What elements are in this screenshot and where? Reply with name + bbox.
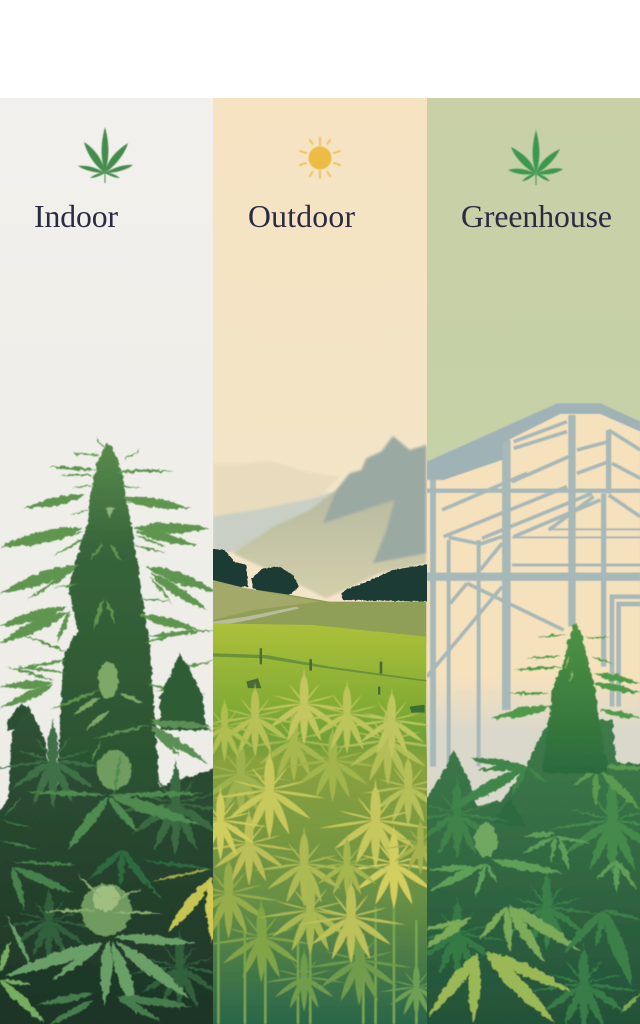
forest bbox=[206, 548, 433, 602]
panel: outdoor bbox=[213, 98, 427, 1024]
greenhouse frame bbox=[427, 403, 640, 817]
heading: Indoor: Indoor bbox=[34, 199, 118, 234]
mountain landscape bbox=[206, 436, 433, 763]
plant: greenhouse top cola bbox=[489, 622, 640, 773]
icon: sun bbox=[300, 138, 340, 178]
icon: cannabis leaf bbox=[508, 130, 563, 185]
plant: lower foliage backdrop bbox=[0, 705, 213, 1024]
heading: Outdoor: Outdoor bbox=[248, 199, 355, 234]
plant: tall indoor cola bbox=[0, 436, 218, 797]
heading: Greenhouse: Greenhouse bbox=[461, 199, 612, 234]
plant: outdoor crop bbox=[213, 668, 427, 1024]
icon: cannabis leaf bbox=[78, 127, 133, 183]
plant: greenhouse foliage bbox=[404, 720, 640, 1024]
meadow bbox=[213, 580, 426, 643]
plant: indoor lower leaves bbox=[0, 718, 213, 1024]
panel: indoor bbox=[0, 98, 213, 1024]
panel: greenhouse bbox=[404, 98, 640, 1024]
